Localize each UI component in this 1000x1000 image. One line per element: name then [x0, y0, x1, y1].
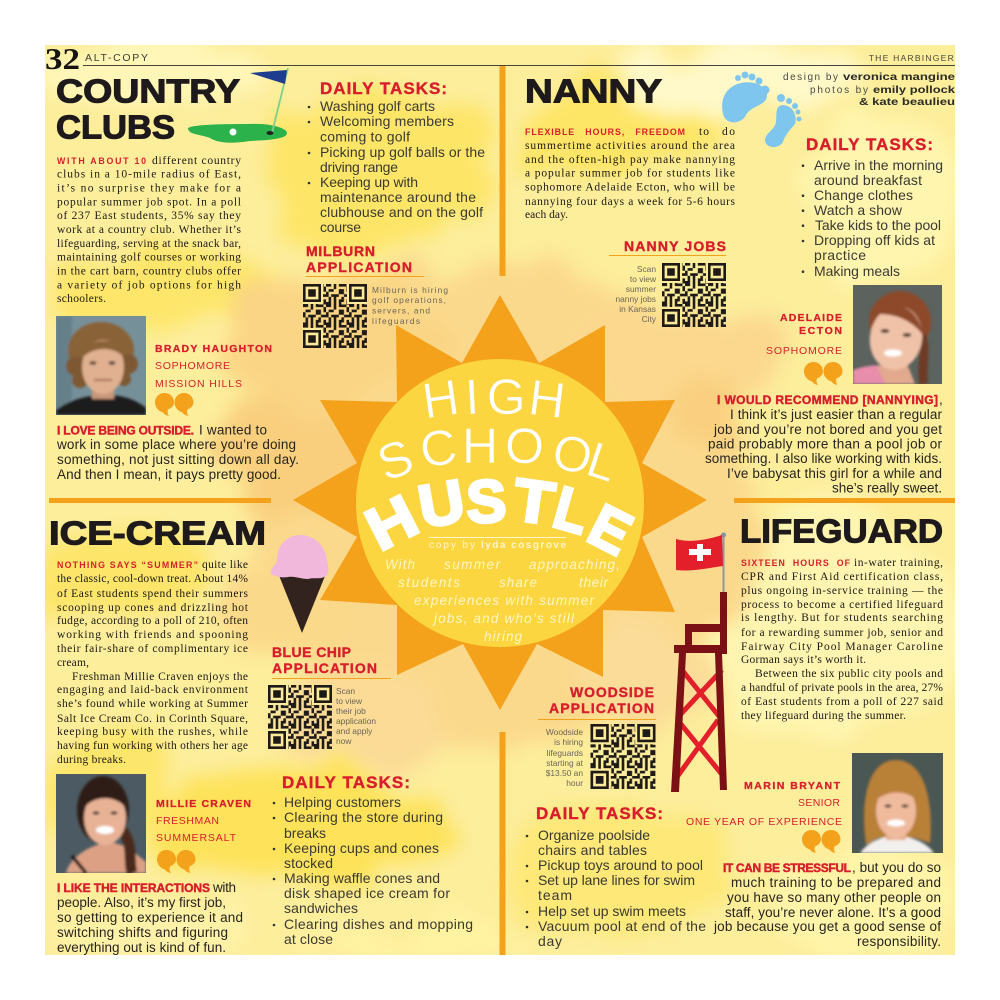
- body text: lifeguarding, serving at the snack bar,: [57, 238, 241, 250]
- body text: sophomore Adelaide Ecton, who will be: [525, 182, 735, 194]
- body text: quite like: [202, 559, 248, 571]
- daily tasks list: clubhouse and on the golf: [320, 204, 483, 220]
- nanny jobs qr block: to view: [630, 274, 657, 284]
- body text: of East students from a poll of 227 said: [741, 696, 943, 708]
- pull quote: [713, 860, 941, 949]
- icon: quote marks: [155, 393, 194, 416]
- pull quote: job because you get a good sense of: [713, 919, 941, 934]
- body text: she’s found while working at Summer: [57, 698, 248, 710]
- body text: [57, 559, 249, 766]
- daily tasks list: [308, 79, 485, 235]
- pull quote: , but you do so: [852, 860, 941, 875]
- daily tasks list: at close: [284, 931, 333, 947]
- icon: ice cream cone: [271, 535, 328, 633]
- daily tasks list: maintenance around the: [320, 189, 476, 205]
- byline: copy: copy by: [429, 540, 475, 551]
- daily tasks list: Clearing dishes and mopping: [284, 916, 473, 932]
- credits: design by: [783, 72, 838, 83]
- intro text: approaching,: [529, 557, 620, 572]
- heading: nanny: NANNY: [525, 74, 662, 110]
- sun disc: [356, 359, 644, 647]
- daily tasks list: Washing golf carts: [320, 98, 435, 114]
- person: brady haughton: SOPHOMORE: [155, 360, 230, 372]
- pull quote: she’s really sweet.: [832, 480, 942, 496]
- daily tasks list: [802, 135, 943, 279]
- woodside qr block: WOODSIDE: [570, 684, 654, 700]
- body text: summertime activities around the area: [525, 140, 735, 152]
- panel: nanny: [525, 71, 955, 496]
- application qr block: lifeguards: [372, 316, 420, 326]
- body text: plus ongoing in-service training — the: [741, 585, 943, 597]
- woodside qr block: hour: [566, 778, 583, 788]
- headline: high school hustle: H: [462, 418, 498, 474]
- blue chip qr block: their job: [336, 706, 366, 716]
- photo: brady haughton: [56, 316, 146, 415]
- daily tasks list: Help set up swim meets: [538, 903, 686, 919]
- pull quote: IT CAN BE STRESSFUL: [723, 861, 851, 875]
- pull quote: you have so many other people on: [727, 890, 941, 905]
- daily tasks list: Picking up golf balls or the: [320, 144, 485, 160]
- body text: maintaining golf courses or working: [57, 252, 241, 264]
- icon: golf green and flag: [188, 68, 288, 143]
- daily tasks list: Making waffle cones and: [284, 870, 440, 886]
- intro text: share: [499, 575, 537, 590]
- person: marin bryant: ONE YEAR OF EXPERIENCE: [686, 816, 842, 828]
- body text: a variety of job options for high: [57, 280, 241, 292]
- body text: it’s no surprise they make for a: [57, 182, 241, 194]
- pull quote: switching shifts and figuring: [57, 925, 228, 940]
- body text: NOTHING SAYS “SUMMER”: [57, 560, 198, 570]
- body text: the classic, cool-down treat. About 14%: [57, 573, 248, 585]
- woodside qr block: APPLICATION: [549, 700, 654, 716]
- intro text: jobs, and who’s still: [432, 611, 575, 626]
- woodside qr block: Woodside: [546, 727, 583, 737]
- nanny jobs qr block: nanny jobs: [615, 294, 656, 304]
- daily tasks list: stocked: [284, 855, 333, 871]
- pull quote: everything out is kind of fun.: [57, 940, 226, 955]
- body text: Between the six public city pools and: [755, 668, 943, 680]
- headline: high school hustle: H: [419, 369, 462, 429]
- woodside qr block: is hiring: [554, 737, 583, 747]
- body text: process to become a certified lifeguard: [741, 599, 943, 611]
- daily tasks list: course: [320, 219, 361, 235]
- woodside qr block: lifeguards: [547, 748, 583, 758]
- blue chip qr block: Scan: [336, 686, 355, 696]
- heading: country clubs: COUNTRY: [56, 74, 240, 110]
- pull quote: with: [212, 880, 236, 895]
- person: adelaide ecton: ECTON: [799, 325, 842, 337]
- headline: high school hustle: L: [580, 431, 624, 493]
- person: marin bryant: MARIN BRYANT: [744, 780, 841, 792]
- pull quote: I wanted to: [199, 422, 267, 438]
- body text: is lengthy. But for students searching: [741, 612, 943, 624]
- daily tasks list: day: [538, 933, 562, 949]
- body text: scooping up cones and drizzling hot: [57, 602, 249, 614]
- daily tasks list: disk shaped ice cream for: [284, 885, 450, 901]
- blue chip qr block: [268, 644, 391, 749]
- body text: work at a country club. Whether it’s: [57, 224, 242, 236]
- daily tasks list: Welcoming members: [320, 113, 454, 129]
- heading: country clubs: CLUBS: [56, 110, 175, 146]
- woodside qr block: [538, 684, 656, 789]
- person: millie craven: MILLIE CRAVEN: [156, 798, 251, 810]
- headline: high school hustle: H: [356, 483, 428, 564]
- panel: country clubs: [56, 68, 485, 482]
- daily tasks list: DAILY TASKS:: [282, 773, 410, 792]
- daily tasks list: Pickup toys around to pool: [538, 857, 703, 873]
- person: millie craven: FRESHMAN: [156, 815, 219, 827]
- daily tasks list: breaks: [284, 825, 326, 841]
- pull quote: [57, 880, 243, 955]
- body text: engaging and laid-back environment: [57, 684, 249, 696]
- body text: a handful of private pools in the area, 27%: [741, 682, 943, 694]
- credits: photos by: [810, 85, 868, 96]
- intro text: hiring: [484, 629, 522, 644]
- daily tasks list: Keeping cups and cones: [284, 840, 439, 856]
- headline: high school hustle: S: [370, 428, 420, 492]
- daily tasks list: Change clothes: [814, 187, 913, 203]
- credits: [783, 71, 955, 108]
- woodside qr block: $13.50 an: [546, 768, 583, 778]
- intro text: their: [579, 575, 608, 590]
- daily tasks list: DAILY TASKS:: [806, 135, 933, 154]
- application qr block: golf operations,: [372, 295, 446, 305]
- heading: lifeguard: LIFEGUARD: [740, 514, 943, 550]
- headline: high school hustle: L: [546, 474, 597, 548]
- body text: each day.: [525, 209, 568, 221]
- headline: high school hustle: H: [526, 369, 568, 429]
- daily tasks list: Watch a show: [814, 202, 903, 218]
- byline: copy: lyda cosgrove: [481, 540, 566, 551]
- page header: [45, 41, 955, 76]
- page header: 32: [45, 41, 80, 76]
- person: marin bryant: [686, 780, 842, 828]
- headline: high school hustle: U: [413, 467, 470, 541]
- blue chip qr block: BLUE CHIP: [272, 644, 351, 660]
- person: marin bryant: SENIOR: [798, 797, 840, 809]
- body text: [741, 557, 943, 722]
- pull quote: I’ve babysat this girl for a while and: [727, 466, 942, 481]
- headline: high school hustle: C: [416, 418, 461, 479]
- person: adelaide ecton: SOPHOMORE: [766, 345, 842, 357]
- body text: do: [722, 126, 735, 138]
- daily tasks list: Keeping up with: [320, 174, 418, 190]
- daily tasks list: sandwiches: [284, 900, 358, 916]
- blue chip qr block: now: [336, 736, 352, 746]
- daily tasks list: Clearing the store during: [284, 809, 443, 825]
- daily tasks list: Take kids to the pool: [815, 217, 941, 233]
- body text: for a rewarding summer job, senior and: [741, 627, 943, 639]
- body text: their fair-share of complimentary ice: [57, 643, 248, 655]
- application qr block: Milburn is hiring: [372, 285, 448, 295]
- daily tasks list: chairs and tables: [538, 842, 647, 858]
- body text: Salt Ice Cream Co. in Corinth Square,: [57, 713, 248, 725]
- panel: sun illustration and title: [293, 295, 707, 710]
- body text: to: [699, 126, 709, 138]
- body text: keeping busy with the rushes, while: [57, 726, 248, 738]
- body text: CPR and First Aid certification class,: [741, 571, 943, 583]
- headline: high school hustle: E: [578, 492, 642, 569]
- daily tasks list: DAILY TASKS:: [536, 804, 663, 823]
- daily tasks list: coming to golf: [320, 128, 410, 144]
- daily tasks list: practice: [814, 247, 866, 263]
- daily tasks list: Vacuum pool at end of the: [538, 918, 706, 934]
- daily tasks list: Making meals: [814, 263, 900, 279]
- headline: high school hustle: O: [504, 417, 545, 475]
- person: adelaide ecton: [766, 312, 842, 357]
- intro text: experiences with summer: [414, 593, 594, 608]
- application qr block: APPLICATION: [306, 259, 412, 275]
- icon: quote marks: [802, 830, 840, 853]
- body text: popular summer job spot. In a poll: [57, 196, 241, 208]
- credits: emily pollock: [873, 84, 955, 96]
- body text: FLEXIBLE HOURS, FREEDOM: [525, 127, 685, 137]
- body text: during breaks.: [57, 754, 126, 766]
- daily tasks list: Dropping off kids at: [814, 232, 935, 248]
- pull quote: staff, you’re never alone. It’s a good: [725, 905, 941, 920]
- body text: of 237 East students, 35% say they: [57, 210, 241, 222]
- daily tasks list: DAILY TASKS:: [320, 79, 447, 98]
- headline: high school hustle: S: [465, 467, 507, 536]
- daily tasks list: driving range: [320, 159, 398, 175]
- byline: copy: [429, 537, 566, 551]
- nanny jobs qr block: [609, 238, 726, 327]
- body text: SIXTEEN HOURS OF: [741, 558, 851, 568]
- pull quote: job and you’re not bored and you get: [713, 422, 942, 437]
- icon: quote marks: [157, 850, 196, 873]
- body text: a popular summer job for students like: [525, 168, 735, 180]
- headline: high school hustle: T: [509, 466, 558, 538]
- body text: in the cart barn, country clubs offer: [57, 266, 241, 278]
- pull quote: [705, 392, 943, 496]
- blue chip qr block: application: [336, 716, 376, 726]
- panel: ice-cream: [49, 516, 473, 955]
- pull quote: so getting to experience it and: [57, 910, 243, 925]
- body text: WITH ABOUT 10: [57, 156, 146, 166]
- person: millie craven: SUMMERSALT: [156, 832, 237, 844]
- pull quote: ,: [939, 392, 943, 407]
- daily tasks list: Arrive in the morning: [814, 157, 943, 173]
- body text: in-water training,: [854, 557, 943, 569]
- icon: lifeguard tower with flag: [671, 532, 727, 792]
- photo: adelaide ecton: [853, 285, 942, 384]
- daily tasks list: [526, 804, 706, 949]
- sun rays: [293, 295, 707, 710]
- body text: and the often-high pay make nannying: [525, 154, 735, 166]
- panel: lifeguard: [526, 514, 943, 949]
- headline: high school hustle: G: [486, 369, 526, 425]
- application qr block: [303, 243, 448, 348]
- body text: schoolers.: [57, 293, 106, 305]
- person: adelaide ecton: ADELAIDE: [780, 312, 842, 324]
- credits: veronica mangine: [843, 71, 955, 83]
- page header: ALT-COPY: [85, 52, 148, 64]
- nanny jobs qr block: Scan: [637, 264, 656, 274]
- nanny jobs qr block: summer: [626, 284, 656, 294]
- nanny jobs qr block: NANNY JOBS: [624, 238, 726, 254]
- heading: country clubs: [56, 74, 240, 146]
- pull quote: people. Also, it’s my first job,: [57, 895, 226, 910]
- body text: working with friends and spooning: [57, 629, 248, 641]
- blue chip qr block: and apply: [336, 726, 373, 736]
- credits: & kate beaulieu: [859, 96, 955, 108]
- person: brady haughton: MISSION HILLS: [155, 378, 242, 390]
- pull quote: much training to be prepared and: [731, 875, 941, 890]
- body text: [57, 155, 242, 305]
- daily tasks list: Organize poolside: [538, 827, 650, 843]
- photo: millie craven: [56, 774, 146, 873]
- headline: high school hustle: O: [548, 423, 597, 486]
- daily tasks list: [273, 773, 473, 947]
- body text: cream,: [57, 657, 89, 669]
- pull quote: something. I also like working with kids.: [705, 451, 942, 466]
- icon: quote marks: [804, 362, 842, 385]
- pull quote: I think it’s just easier than a regular: [730, 407, 942, 422]
- photo: marin bryant: [852, 753, 943, 853]
- icon: baby footprints: [722, 72, 802, 147]
- person: brady haughton: BRADY HAUGHTON: [155, 343, 272, 355]
- body text: of East students spend their summers: [57, 588, 249, 600]
- headline: high school hustle: I: [464, 369, 481, 425]
- woodside qr block: starting at: [546, 758, 584, 768]
- intro text: summer: [444, 557, 500, 572]
- application qr block: servers, and: [372, 306, 430, 316]
- daily tasks list: Set up lane lines for swim: [538, 872, 695, 888]
- page header: THE HARBINGER: [869, 53, 955, 63]
- body text: Gorman says it’s worth it.: [741, 654, 866, 666]
- blue chip qr block: APPLICATION: [272, 660, 377, 676]
- blue chip qr block: to view: [336, 696, 363, 706]
- person: brady haughton: [155, 343, 272, 390]
- intro text: [385, 557, 620, 644]
- body text: fudge, according to a poll of 210, often: [57, 615, 248, 627]
- pull quote: I WOULD RECOMMEND [NANNYING]: [717, 393, 938, 407]
- pull quote: I LIKE THE INTERACTIONS: [57, 881, 210, 895]
- body text: nannying four days a week for 5-6 hours: [525, 196, 736, 208]
- daily tasks list: Helping customers: [284, 794, 401, 810]
- pull quote: responsibility.: [857, 934, 941, 949]
- pull quote: I LOVE BEING OUTSIDE.: [57, 424, 194, 438]
- daily tasks list: around breakfast: [814, 172, 922, 188]
- application qr block: MILBURN: [306, 243, 375, 259]
- daily tasks list: team: [538, 887, 572, 903]
- heading: ice-cream: ICE-CREAM: [49, 516, 266, 552]
- intro text: With: [385, 557, 415, 572]
- pull quote: something, not just sitting down all day.: [57, 452, 299, 467]
- person: millie craven: [156, 798, 251, 844]
- body text: they lifeguard during the summer.: [741, 710, 906, 722]
- nanny jobs qr block: in Kansas: [619, 304, 656, 314]
- headline: high school hustle: [356, 369, 642, 569]
- pull quote: work in some place where you’re doing: [56, 437, 296, 452]
- body text: Freshman Millie Craven enjoys the: [72, 671, 248, 683]
- pull quote: paid probably more than a pool job or: [708, 436, 942, 452]
- nanny jobs qr block: City: [642, 314, 657, 324]
- body text: different country: [152, 155, 241, 167]
- body text: clubs in a 10-mile radius of East,: [57, 168, 241, 180]
- pull quote: [56, 422, 299, 482]
- pull quote: And then I mean, it pays pretty good.: [57, 467, 281, 482]
- intro text: students: [398, 575, 460, 590]
- body text: Fairway City Pool Manager Caroline: [741, 641, 943, 653]
- body text: having fun working with others her age: [57, 740, 248, 752]
- body text: [525, 126, 736, 221]
